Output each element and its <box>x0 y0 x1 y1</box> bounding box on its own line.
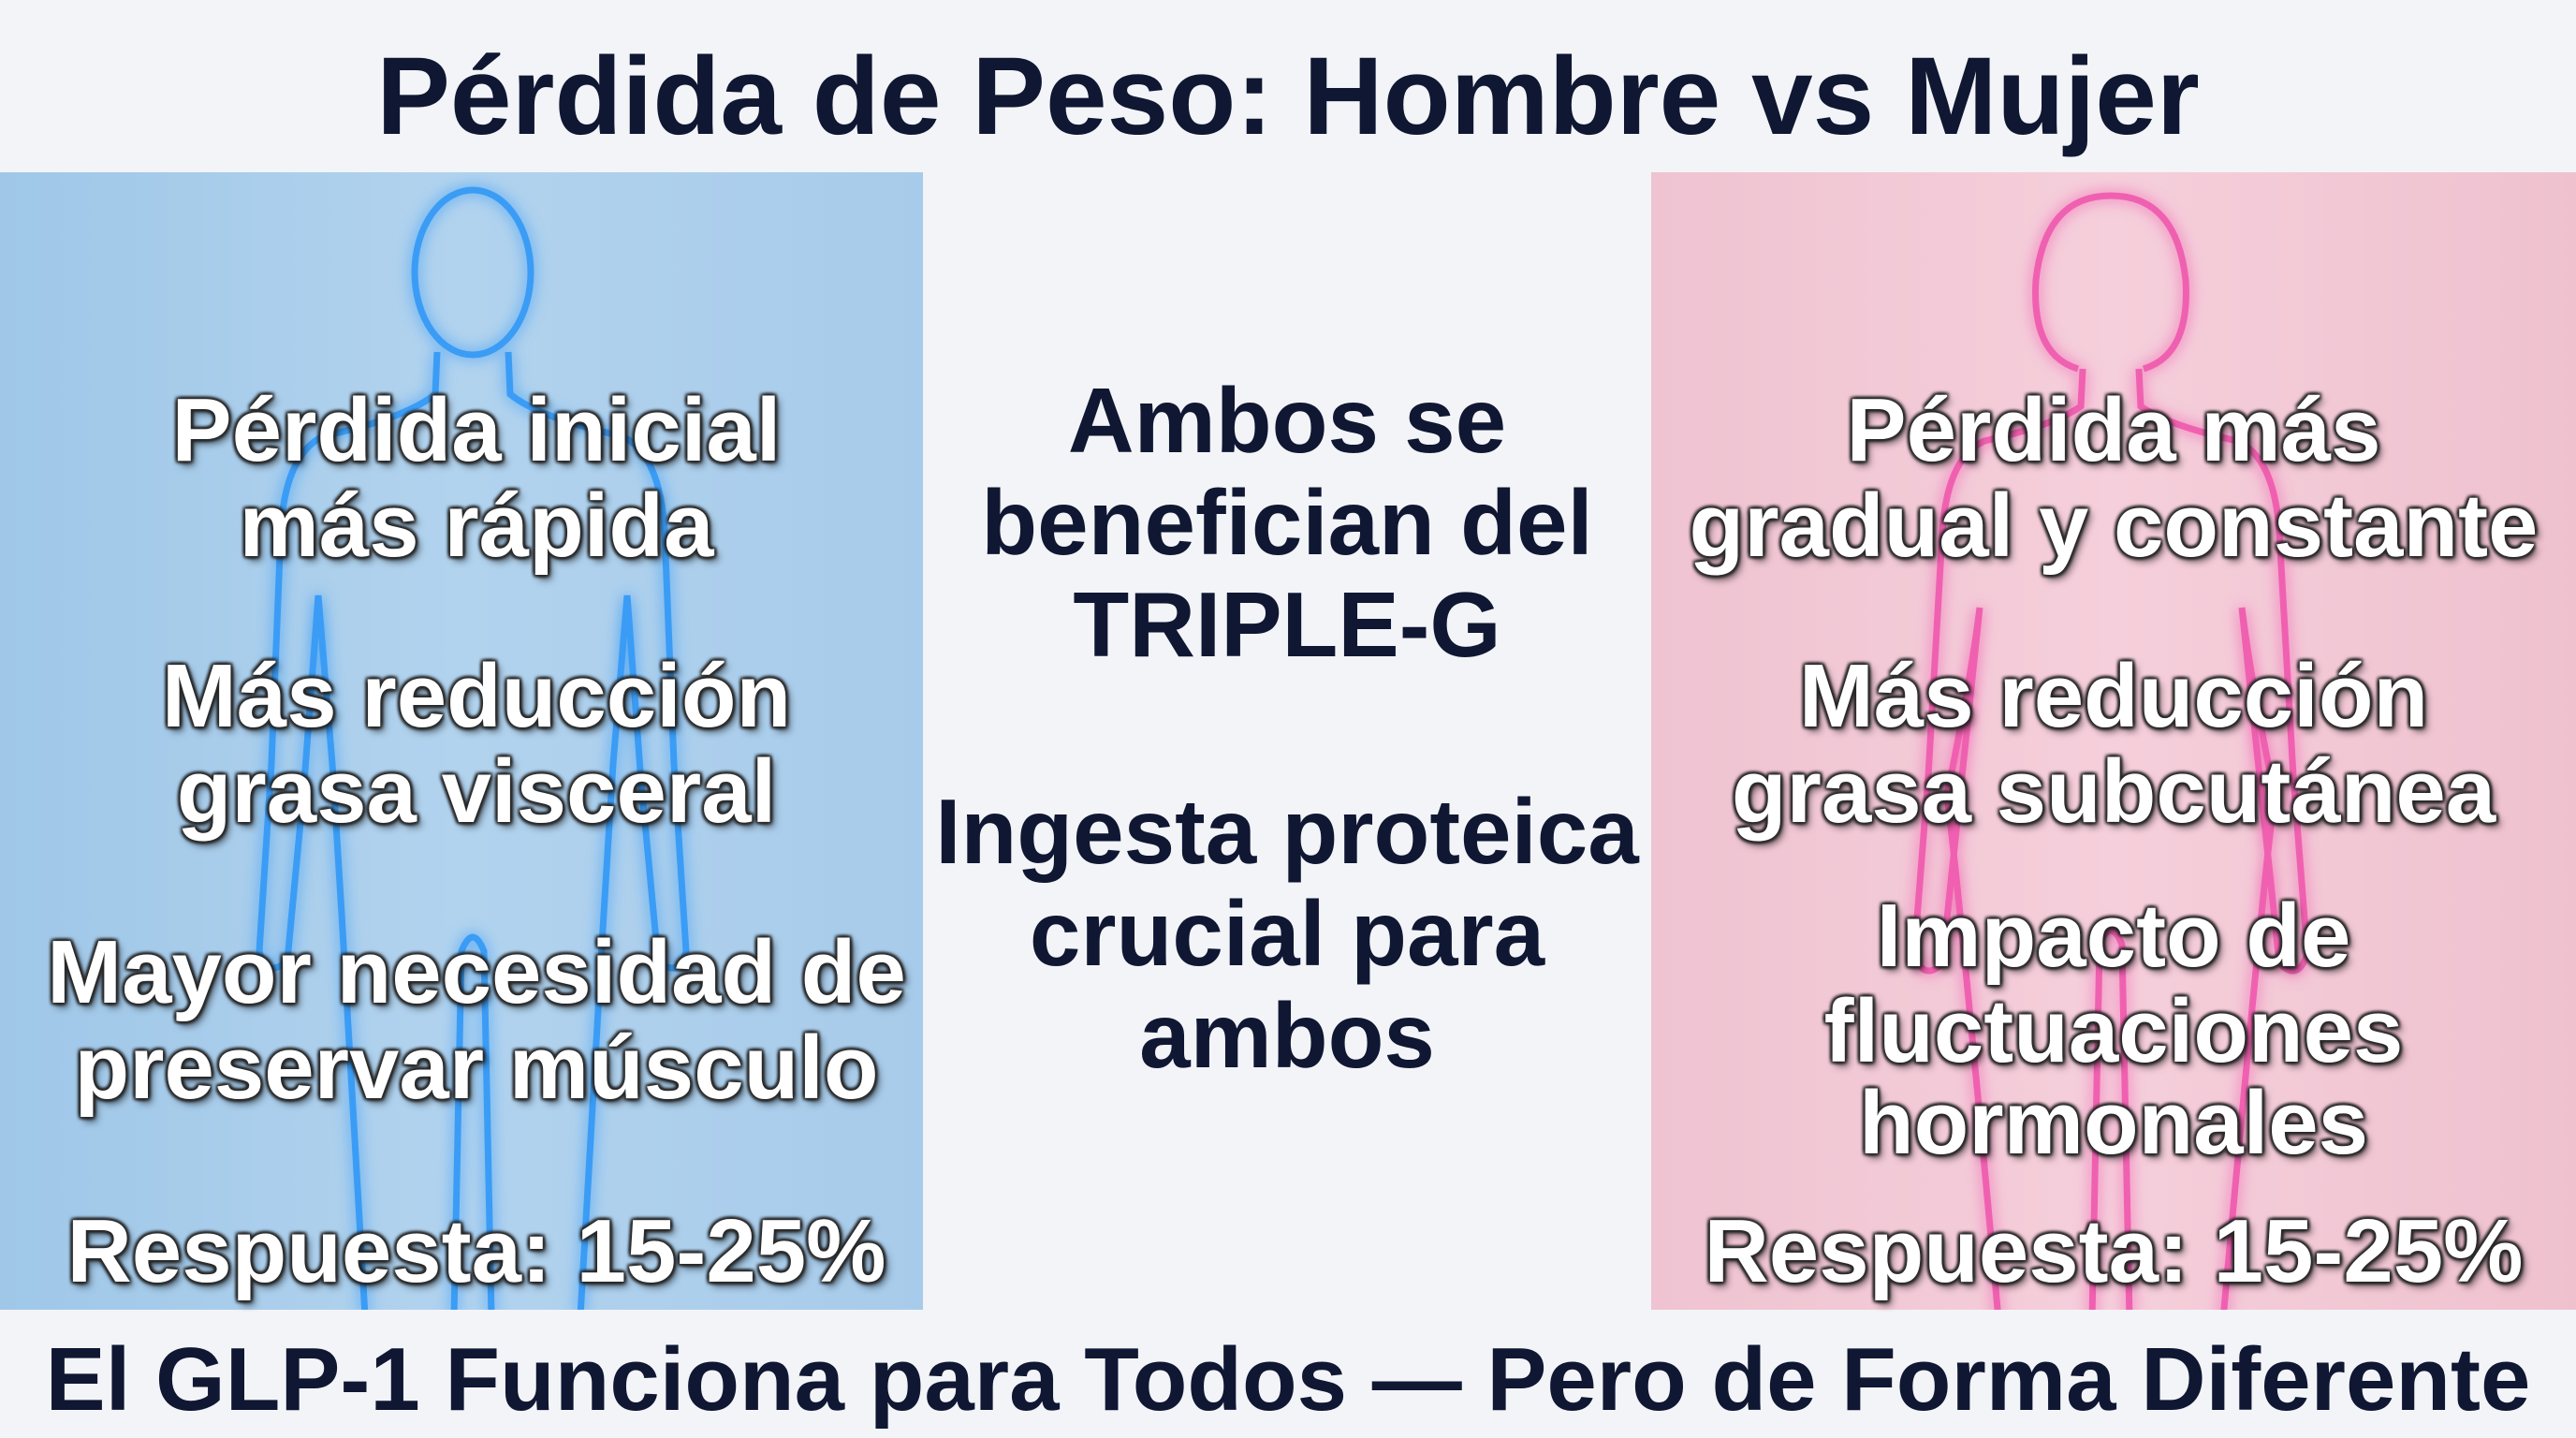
text: hombre puntos: Respuesta: 15-25% <box>66 1201 886 1301</box>
panel: mujer <box>1651 172 2576 1310</box>
text: hombre puntos: Pérdida inicial <box>172 380 781 480</box>
text: hombre puntos: Mayor necesidad de <box>47 922 906 1022</box>
panel: hombre <box>0 172 923 1310</box>
footer tagline: El GLP-1 Funciona para Todos — Pero de Forma Diferente <box>46 1329 2530 1430</box>
text: mujer puntos: Más reducción <box>1799 646 2428 746</box>
text: mujer puntos: gradual y constante <box>1690 476 2538 576</box>
text: centro comun: crucial para <box>1030 882 1544 985</box>
text: centro comun <box>935 369 1640 1087</box>
text: hombre puntos: Más reducción <box>162 646 791 746</box>
text: mujer puntos <box>1688 380 2544 1311</box>
text: centro comun: benefician del <box>981 471 1593 574</box>
text: centro comun: TRIPLE-G <box>1073 573 1501 676</box>
text: hombre puntos: más rápida <box>240 476 713 576</box>
text: centro comun: Ambos se <box>1068 369 1506 472</box>
icon: female body outline <box>1902 183 2318 1310</box>
text: mujer puntos: hormonales <box>1859 1073 2368 1173</box>
text: centro comun: Ingesta proteica <box>935 780 1639 883</box>
text: mujer puntos: Respuesta: 15-25% <box>1704 1201 2524 1301</box>
text: mujer puntos: Pérdida más <box>1847 380 2380 480</box>
text: mujer puntos: Impacto de <box>1877 886 2350 986</box>
text: hombre puntos: grasa visceral <box>177 741 776 842</box>
text: mujer puntos: grasa subcutánea <box>1732 741 2496 842</box>
text: hombre puntos <box>47 380 912 1311</box>
text: mujer puntos: fluctuaciones <box>1824 981 2403 1081</box>
text: hombre puntos: preservar músculo <box>74 1018 879 1118</box>
text: centro comun: ambos <box>1139 984 1435 1087</box>
title: Pérdida de Peso: Hombre vs Mujer <box>376 35 2200 158</box>
icon: male body outline <box>247 178 698 1310</box>
